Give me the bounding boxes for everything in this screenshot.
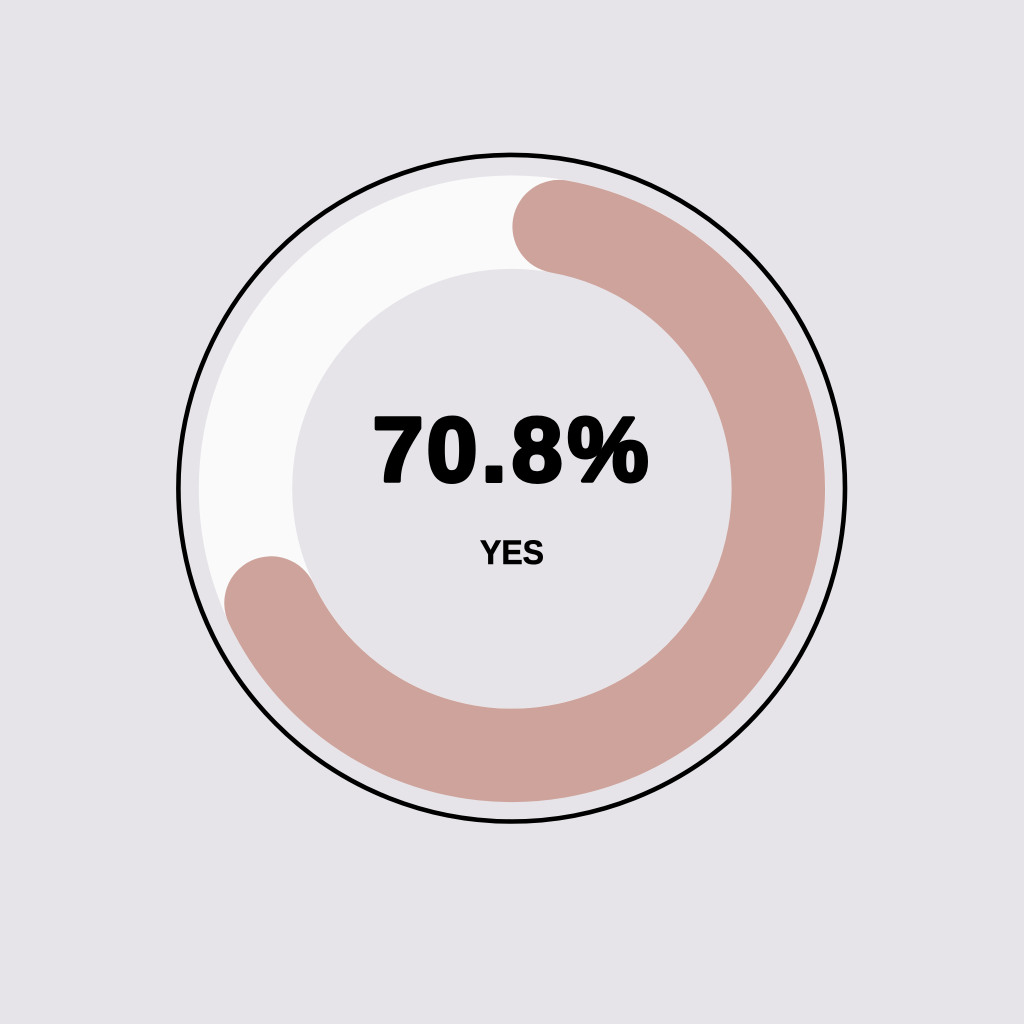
outer ring outline [178, 155, 845, 822]
donut value arc: 70.8% [271, 227, 778, 755]
percentage value: 70.8% [373, 400, 648, 501]
answer label: YES [480, 534, 544, 572]
donut track [246, 222, 778, 755]
